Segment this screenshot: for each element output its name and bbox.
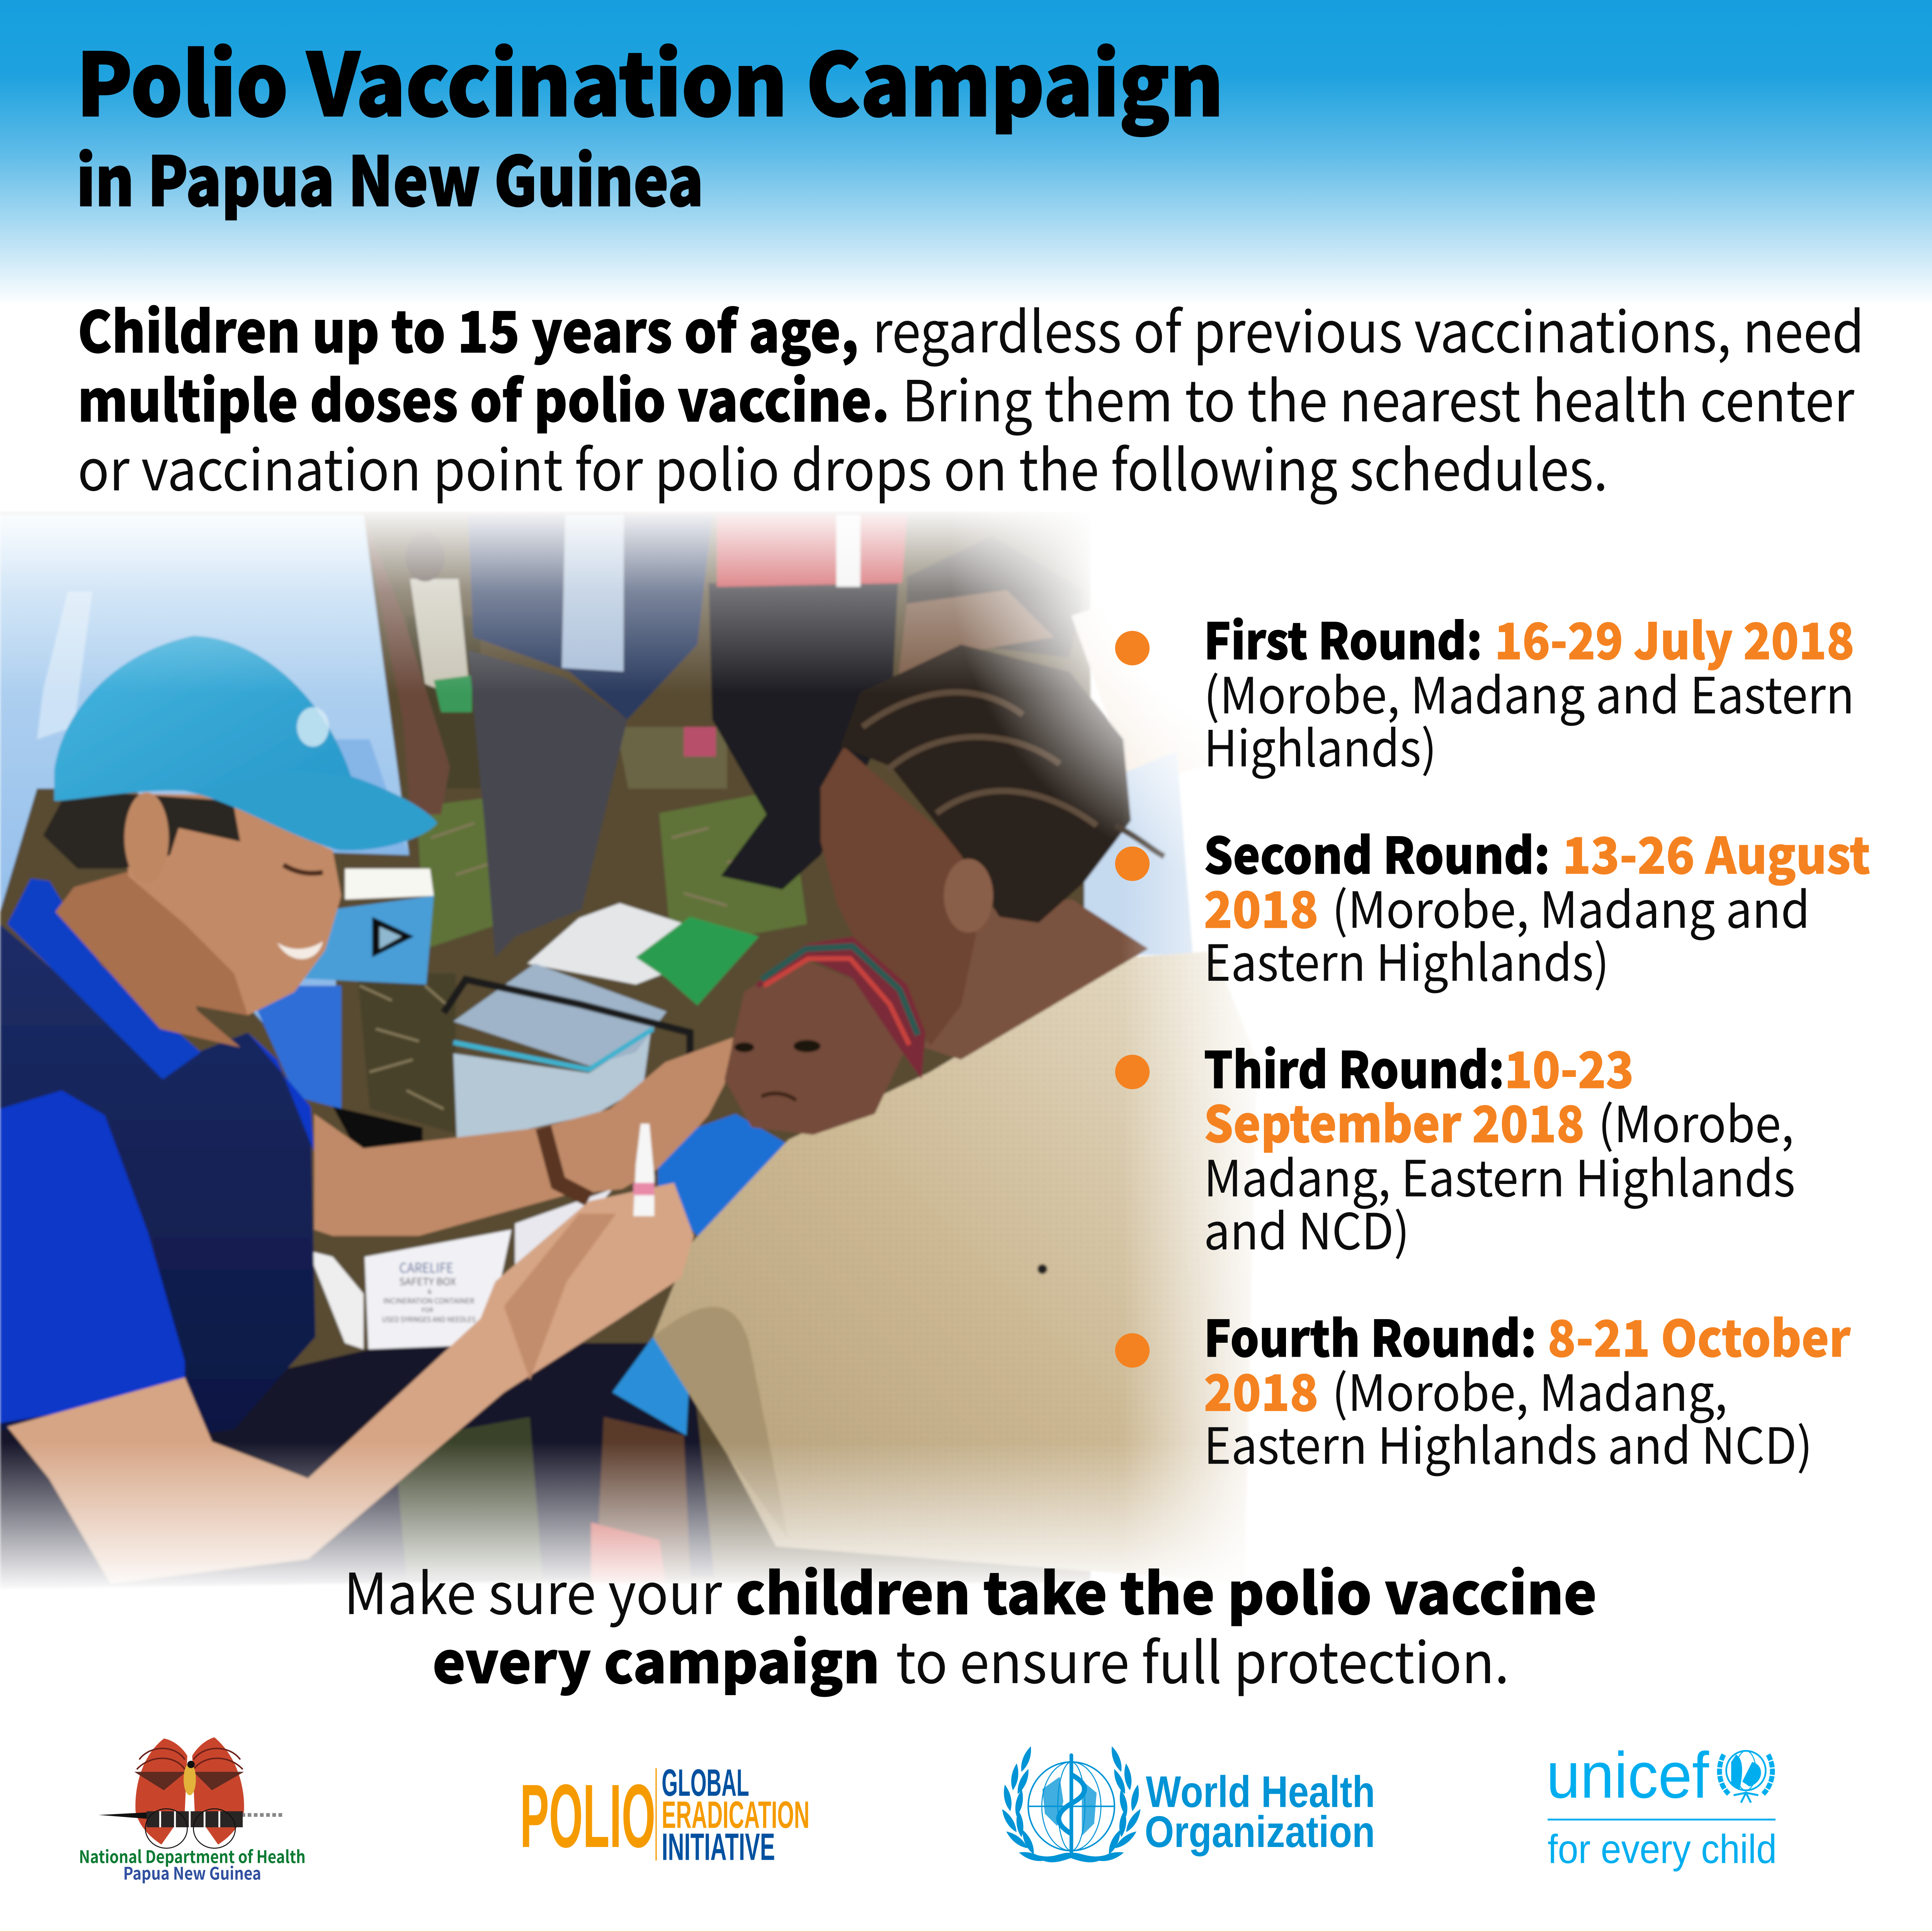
subtitle: in Papua New Guinea xyxy=(77,127,704,226)
safety box: CARELIFE xyxy=(399,1258,453,1278)
seated bystander xyxy=(410,579,471,702)
intro paragraph: or vaccination point for polio drops on the following schedules. xyxy=(78,426,1608,508)
baby's blue shirt xyxy=(658,1114,806,1291)
call to action: every campaign xyxy=(432,1619,880,1701)
schedule: fourth round: Fourth Round: xyxy=(1204,1299,1536,1371)
logo: UNICEF xyxy=(1546,1740,1777,1872)
schedule: third round: (Morobe, xyxy=(1598,1084,1794,1157)
woman behind xyxy=(907,536,1084,658)
logo: World Health Organization: World Health xyxy=(1146,1766,1375,1817)
safety box: INCINERATION CONTAINER xyxy=(383,1295,474,1306)
schedule: fourth round: (Morobe, Madang, xyxy=(1332,1353,1728,1425)
photo: health worker giving polio drops to a child xyxy=(0,511,1257,1590)
safety box: FOR xyxy=(422,1306,434,1315)
emblem: UNICEF globe with mother and child xyxy=(1719,1751,1772,1803)
intro paragraph: regardless of previous vaccinations, need xyxy=(872,288,1864,370)
schedule: fourth round xyxy=(1115,1299,1851,1479)
call to action: to ensure full protection. xyxy=(896,1619,1509,1701)
schedule: first round xyxy=(1115,601,1854,781)
logo: National Department of Health: Papua New Guinea xyxy=(123,1861,261,1886)
intro paragraph: Bring them to the nearest health center xyxy=(902,357,1855,439)
schedule: second round: 13-26 August xyxy=(1562,816,1871,888)
schedule: second round: (Morobe, Madang and xyxy=(1332,870,1810,942)
logo: Global Polio Eradication Initiative: POLIO xyxy=(520,1767,655,1867)
schedule: fourth round: Eastern Highlands and NCD) xyxy=(1204,1406,1813,1479)
logo: National Department of Health: National Department of Health xyxy=(79,1845,306,1869)
logo: UNICEF: unicef xyxy=(1546,1740,1709,1813)
bags xyxy=(527,903,690,985)
logo: National Department of Health xyxy=(79,1737,306,1886)
logo: Global Polio Eradication Initiative: ERADICATION xyxy=(662,1793,810,1837)
safety box: & xyxy=(428,1287,432,1296)
schedule: first round: First Round: xyxy=(1204,601,1482,674)
call to action: Make sure your xyxy=(344,1550,722,1631)
schedule: first round: Highlands) xyxy=(1204,709,1437,781)
schedule: third round: September 2018 xyxy=(1204,1084,1585,1157)
call to action: children take the polio vaccine xyxy=(736,1550,1597,1631)
blue uniforms at left xyxy=(0,515,411,1024)
intro paragraph: multiple doses of polio vaccine. xyxy=(78,357,889,439)
schedule: second round: 2018 xyxy=(1204,870,1318,942)
man: neck and face xyxy=(43,792,341,1047)
schedule: third round: Third Round: xyxy=(1204,1030,1504,1103)
schedule: second round: Eastern Highlands) xyxy=(1204,923,1609,996)
baby: face xyxy=(724,957,907,1135)
header gradient band xyxy=(0,0,1932,306)
safety box: SAFETY BOX xyxy=(399,1275,456,1289)
man: vest and shirt xyxy=(0,879,315,1442)
intro paragraph: Children up to 15 years of age, xyxy=(78,288,859,370)
intro paragraph xyxy=(78,288,1864,508)
schedule: second round xyxy=(1115,816,1871,996)
schedule: third round: Madang, Eastern Highlands xyxy=(1204,1138,1795,1211)
dark trousers xyxy=(0,1343,714,1590)
schedule: third round: 10-23 xyxy=(1504,1030,1634,1103)
schedule: third round: and NCD) xyxy=(1204,1192,1410,1264)
schedule: third round xyxy=(1115,1030,1795,1264)
safety box xyxy=(365,1189,612,1349)
baby's shorts and leg xyxy=(592,1337,690,1583)
standing people xyxy=(468,651,627,957)
logo: Global Polio Eradication Initiative: GLOBAL xyxy=(662,1761,749,1804)
schedule: fourth round: 8-21 October xyxy=(1548,1299,1851,1371)
safety box: USED SYRINGES AND NEEDLES xyxy=(382,1313,476,1325)
wristwatch xyxy=(543,1128,589,1199)
woman: beige sweater xyxy=(653,951,1257,1583)
logo: World Health Organization xyxy=(998,1745,1375,1862)
man: cyan cap xyxy=(54,636,437,850)
logo: UNICEF: for every child xyxy=(1548,1826,1777,1872)
woman: face and neck xyxy=(821,747,1148,1060)
book xyxy=(345,869,434,900)
logo: World Health Organization: Organization xyxy=(1145,1806,1375,1857)
schedule: second round: Second Round: xyxy=(1204,816,1550,888)
schedule: first round: 16-29 July 2018 xyxy=(1495,601,1854,674)
title: Polio Vaccination Campaign xyxy=(77,17,1223,142)
woman: braided hair xyxy=(840,645,1164,933)
call to action xyxy=(344,1550,1597,1701)
schedule: first round: (Morobe, Madang and Eastern xyxy=(1204,655,1854,728)
man: arm reaching to child's face xyxy=(314,1037,733,1236)
logo: Global Polio Eradication Initiative: INITIATIVE xyxy=(662,1825,775,1869)
emblem: bird of paradise xyxy=(99,1737,285,1848)
man: hand holding vaccine vial xyxy=(7,1124,694,1583)
emblem: UN globe, staff and laurels xyxy=(998,1745,1144,1862)
baby: striped woven hat xyxy=(755,936,925,1079)
schedule: fourth round: 2018 xyxy=(1204,1353,1318,1425)
photo fade overlays xyxy=(0,509,1285,1595)
cool box xyxy=(444,964,690,1145)
photo ground xyxy=(0,511,1090,1583)
